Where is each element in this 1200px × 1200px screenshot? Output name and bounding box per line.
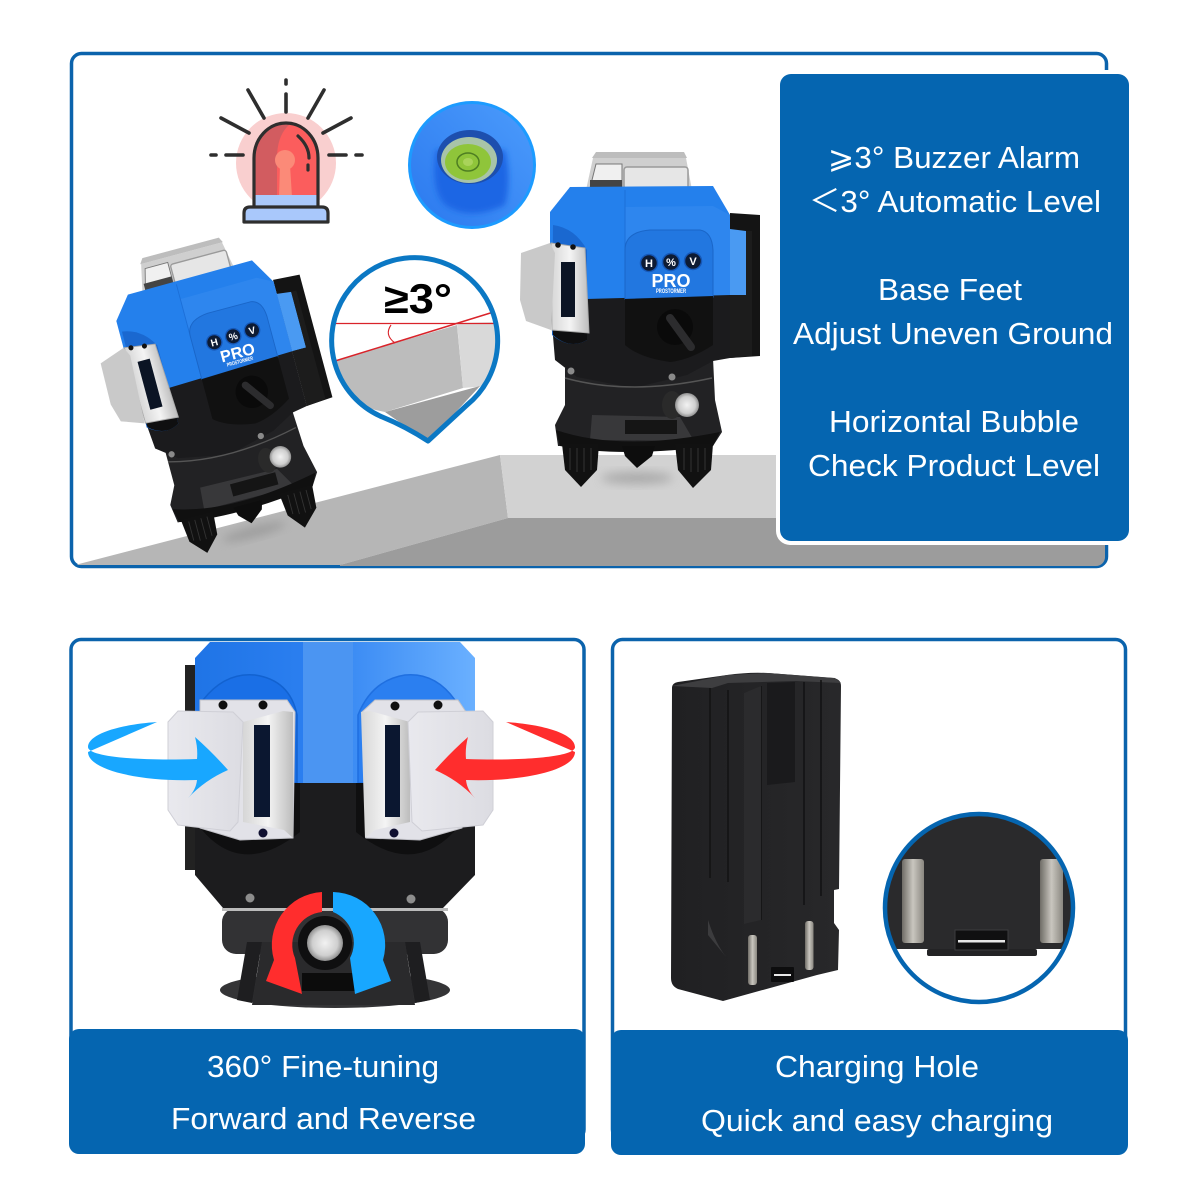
callout: three-degree tilt magnifier: [330, 258, 500, 442]
product: level laser level on flat step: [520, 152, 760, 488]
arrow: blue knob clockwise: [333, 892, 391, 994]
inset: charging port close-up: [880, 810, 1080, 1002]
caption: charging: [611, 1030, 1128, 1155]
product: level laser level on flat step: V: [689, 256, 697, 268]
product: level laser level on flat step: H: [645, 258, 653, 270]
panel: feature list: Base Feet: [878, 272, 1022, 307]
arrow: blue rotate right: [88, 722, 228, 798]
product: level laser level on flat step: PRO: [651, 271, 691, 291]
panel: feature list: [776, 70, 1133, 545]
icon: bubble level close-up: [408, 101, 536, 229]
panel: feature list: Adjust Uneven Ground: [793, 316, 1113, 351]
arrow: red rotate left: [435, 722, 575, 798]
icon: red alarm beacon: [211, 80, 362, 223]
product: tilted laser level on ramp: %: [228, 331, 239, 344]
product: level laser level on flat step: PROSTORMER: [656, 289, 686, 295]
product: tilted laser level on ramp: V: [248, 325, 257, 338]
panel: feature list: ⩾3° Buzzer Alarm: [828, 140, 1080, 175]
panel: fine-tuning: [69, 640, 585, 1154]
arrow: red knob counter-clockwise: [266, 892, 322, 994]
panel: feature list: ＜3° Automatic Level: [809, 184, 1101, 219]
callout angle label: ≥3°: [384, 275, 452, 322]
panel: feature list: Check Product Level: [808, 448, 1100, 483]
panel: charging hole: Charging Hole: [775, 1049, 979, 1084]
product: tilted laser level on ramp: PRO: [218, 340, 257, 366]
panel: auto-level scene: [72, 54, 1106, 566]
panel: fine-tuning: Forward and Reverse: [171, 1101, 476, 1136]
product: tilted laser level on ramp: PROSTORMER: [226, 356, 254, 369]
panel: feature list: Horizontal Bubble: [829, 404, 1079, 439]
caption: fine-tuning: [69, 1029, 585, 1154]
panel: charging hole: Quick and easy charging: [701, 1103, 1053, 1138]
product: tilted laser level on ramp: H: [210, 337, 219, 350]
product: tilted laser level on ramp: [76, 220, 363, 568]
panel: charging hole: [611, 640, 1128, 1155]
product: level laser level on flat step: %: [666, 257, 676, 269]
battery pack: [671, 673, 841, 1001]
panel: fine-tuning: 360° Fine-tuning: [207, 1049, 439, 1084]
laser head close-up: [168, 642, 493, 1008]
